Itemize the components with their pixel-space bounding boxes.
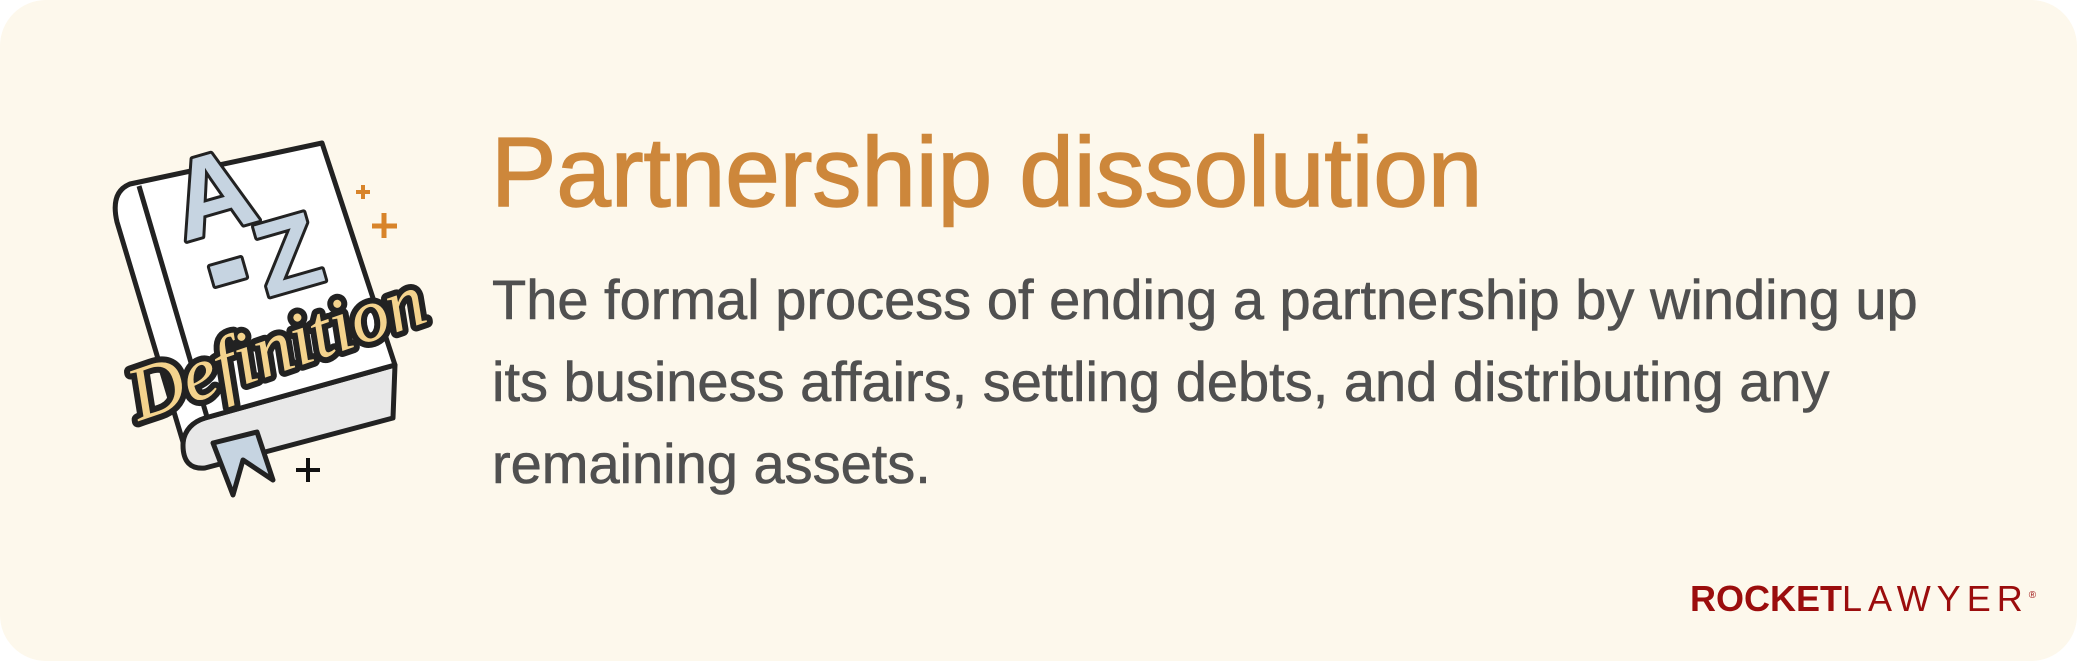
sparkles [356,185,370,199]
letters A-Z: A [156,122,269,265]
letters A-Z [156,122,334,319]
definition text: The formal process of ending a partnership by winding up [492,268,1918,331]
letters A-Z: Z [241,190,334,319]
title: Partnership dissolution [491,117,1482,227]
book cover [115,143,395,442]
definition text [492,268,1918,495]
logo: Rocket Lawyer: ROCKETLAWYER® [1690,578,2036,619]
definition text: its business affairs, settling debts, and distributing any [492,350,1830,413]
script text: Definition: Definition [116,257,436,437]
bookmark [213,432,273,495]
definition text: remaining assets. [492,432,931,495]
icon: definition book [112,122,436,498]
book pages [183,365,395,468]
